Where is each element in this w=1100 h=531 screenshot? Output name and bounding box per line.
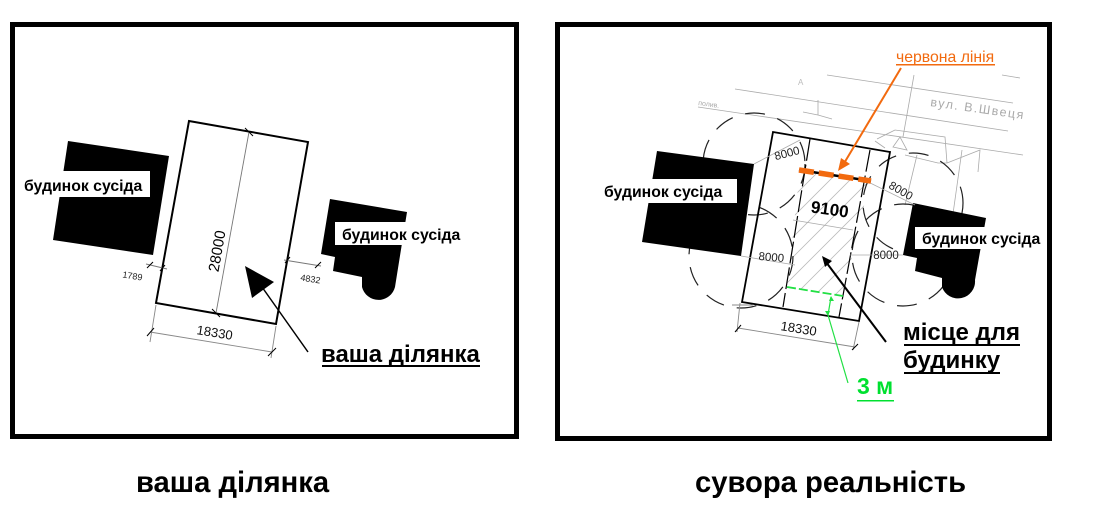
survey label: полив. <box>698 100 720 110</box>
arrow to plot <box>245 266 308 352</box>
dimension: width 18330: 18330 <box>196 322 234 343</box>
green 3 m setback <box>787 287 848 383</box>
neighbour house right <box>903 203 986 298</box>
dimension: gap 1789: 1789 <box>122 270 143 283</box>
inner dimension line <box>741 140 915 265</box>
caption: your plot: ваша ділянка <box>136 467 330 499</box>
dimension: gap 1789 <box>122 262 167 283</box>
dimension: width 18330 <box>147 305 276 358</box>
hatched building zone <box>788 174 866 294</box>
survey label A: А <box>798 78 804 87</box>
neighbour house left <box>53 141 169 255</box>
panel: your plot <box>12 24 516 436</box>
dimension labels 8000: 8000 <box>773 145 801 163</box>
neighbour label right <box>335 222 463 245</box>
black arrow to building site <box>822 256 886 342</box>
callout: your plot: ваша ділянка <box>321 341 480 368</box>
neighbour label left <box>20 171 150 197</box>
callout: building site <box>903 319 1020 374</box>
dimension: length 28000: 28000 <box>206 229 230 273</box>
orange arrow <box>838 68 901 171</box>
dimension: gap 4832 <box>284 257 321 286</box>
neighbour label left <box>597 179 737 203</box>
setback circles <box>689 113 963 308</box>
neighbour label left: будинок сусіда <box>24 178 143 195</box>
dimension: width 18330 <box>732 303 859 350</box>
neighbour label right: будинок сусіда <box>342 227 461 244</box>
callout: building site: будинку <box>903 347 1001 374</box>
panel frame: right <box>558 24 1050 438</box>
area label 9100: 9100 <box>810 198 850 222</box>
setback lines <box>783 139 870 317</box>
dimension labels 8000: 8000 <box>873 250 899 262</box>
dimension labels 8000 <box>758 145 915 265</box>
neighbour label right: будинок сусіда <box>922 231 1041 248</box>
dimension: width 18330: 18330 <box>780 318 818 339</box>
callout: 3 m: 3 м <box>857 373 893 399</box>
dimension: length 28000 <box>206 128 253 317</box>
neighbour house left <box>642 151 754 256</box>
neighbour label left: будинок сусіда <box>604 184 723 201</box>
panel: harsh reality <box>558 24 1050 438</box>
street label: вул. В.Швеця <box>930 95 1026 122</box>
dimension labels 8000: 8000 <box>886 180 915 203</box>
callout: building site: місце для <box>903 319 1020 346</box>
callout: red line: червона лінія <box>896 49 994 66</box>
plot outline <box>156 121 308 324</box>
caption: harsh reality: сувора реальність <box>695 467 966 499</box>
neighbour house right <box>321 199 407 300</box>
red line <box>799 170 871 181</box>
dimension labels 8000: 8000 <box>758 251 785 265</box>
panel frame: left <box>12 24 516 436</box>
street survey lines <box>698 75 1023 235</box>
dimension: gap 4832: 4832 <box>300 273 321 286</box>
plot outline <box>742 132 890 321</box>
